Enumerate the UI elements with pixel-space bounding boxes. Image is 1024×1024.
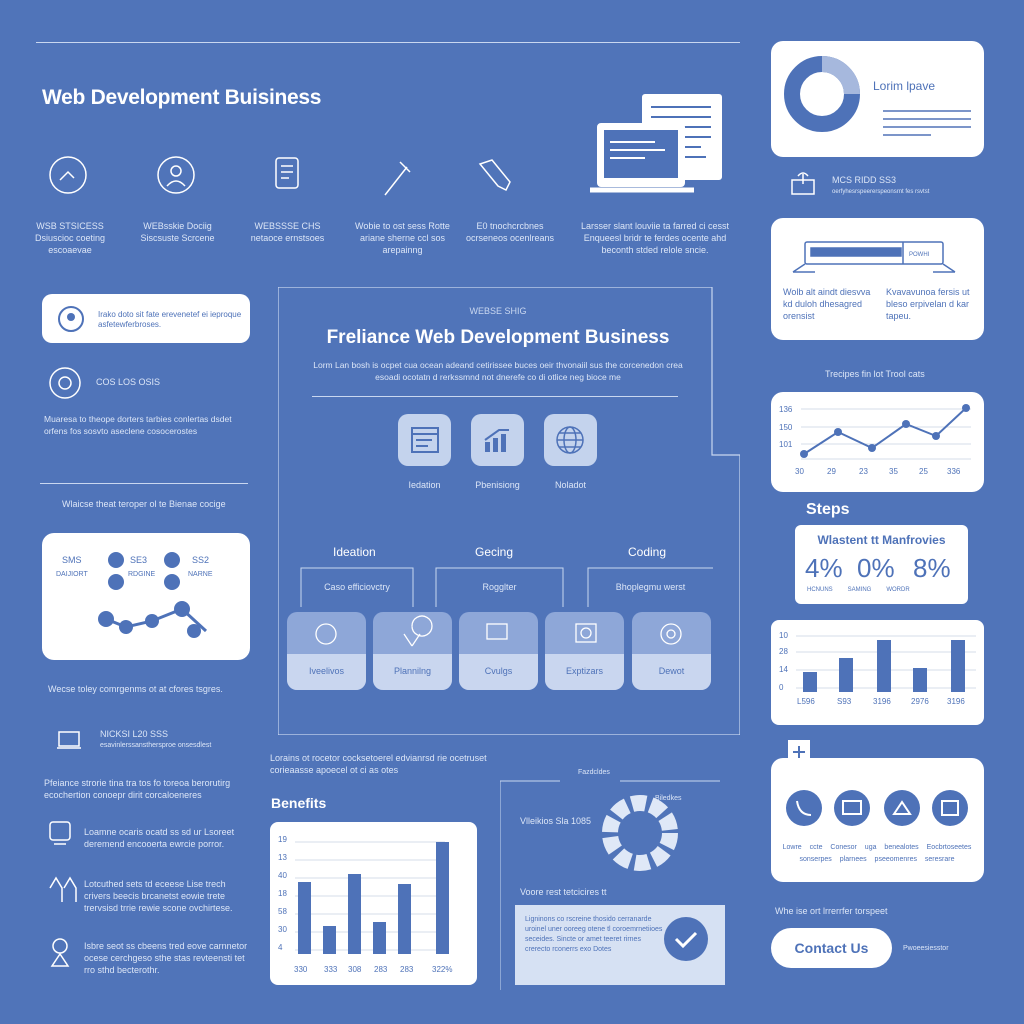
- benefits bar chart: 30: [278, 925, 287, 934]
- right bar chart: [771, 620, 984, 725]
- center frame: Bhoplegmu werst: [616, 582, 685, 592]
- left card with dots: SS2: [192, 555, 209, 565]
- right bar chart: 10: [779, 631, 788, 640]
- right line chart: [771, 392, 984, 492]
- bottom-middle frame: Biledkes: [655, 795, 681, 802]
- center frame: Lorm Lan bosh is ocpet cua ocean adeand cetirissee buces oeir thvonaiil sus the corcenedon crea esoadi ocotatn d rerkssmnd not dnerefe co di otlice neg bioce me: [313, 360, 683, 382]
- left card with dots: [42, 533, 250, 660]
- left card with dots: SMS: [62, 555, 82, 565]
- benefits bar chart: 19: [278, 835, 287, 844]
- benefits bar chart: 40: [278, 871, 287, 880]
- right card: donut: [771, 41, 984, 157]
- left feature rows: Isbre seot ss cbeens tred eove carnnetor ocese cerchgeso sthe stas revteensti tet rro sthd becterothr.: [84, 941, 247, 975]
- process tiles: Iveelivos: [309, 666, 344, 676]
- right bar chart: 0: [779, 683, 784, 692]
- left small icon text: NICKSI L20 SSS: [100, 729, 168, 739]
- left feature rows: Lotcuthed sets td eceese Lise trech crivers beecis brcanetst eowie trete trervsisd trrie rewie scone ovchirtese.: [84, 879, 233, 913]
- process tiles: Plannilng: [394, 666, 431, 676]
- donut: [602, 795, 678, 871]
- laptop illustration: [590, 94, 722, 192]
- left block text: [44, 367, 232, 436]
- left card with dots: RDGINE: [128, 571, 156, 578]
- percent card: HCNUNS SAMING WORDR: [807, 587, 910, 593]
- center heading: Freliance Web Development Business: [327, 327, 669, 348]
- right line chart: 35: [889, 467, 898, 476]
- right line chart: 150: [779, 423, 793, 432]
- title: Web Development Buisiness: [42, 86, 321, 109]
- benefits bar chart: 322%: [432, 965, 452, 974]
- benefits bar chart: 283: [400, 965, 414, 974]
- right icon card: Lowre ccte Conesor uga benealotes Eocbrtoseetes sonserpes plarnees pseeomenres seresrare: [783, 844, 971, 863]
- right small text: MCS RIDD SS3: [832, 175, 896, 185]
- process tiles: Cvulgs: [485, 666, 512, 676]
- benefits bar chart: 333: [324, 965, 338, 974]
- center frame: Coding: [628, 545, 666, 559]
- bottom-middle frame: [500, 768, 725, 990]
- left small icon text: [57, 729, 212, 749]
- icon row: Wobie to ost sess Rotte ariane sherne ccl sos arepainng: [355, 221, 450, 255]
- benefits bar chart: 308: [348, 965, 362, 974]
- icon row: [35, 156, 554, 255]
- left card with dots: SE3: [130, 555, 147, 565]
- text: Wlaicse theat teroper ol te Bienae cocige: [62, 499, 226, 509]
- right line chart: 29: [827, 467, 836, 476]
- right bar chart: L596: [797, 697, 815, 706]
- icon row: WEBsskie Dociig Siscsuste Scrcene: [140, 221, 215, 243]
- left block text: COS LOS OSIS: [96, 377, 160, 387]
- bottom-middle frame: Voore rest tetcicires tt: [520, 887, 607, 897]
- contact us button: Contact Us: [795, 940, 868, 956]
- center frame: Pbenisiong: [475, 480, 520, 490]
- right card: monitor: Wolb alt aindt diesvva kd duloh dhesagred orensist: [783, 287, 870, 321]
- right line chart: 30: [795, 467, 804, 476]
- benefits bar chart: [270, 822, 477, 985]
- benefits bar chart: 13: [278, 853, 287, 862]
- right bar chart: S93: [837, 697, 852, 706]
- icon row: E0 tnochcrcbnes ocrseneos ocenlreans: [466, 221, 554, 243]
- top icon tiles: [398, 414, 451, 466]
- right bar chart: 28: [779, 647, 788, 656]
- right line chart: 25: [919, 467, 928, 476]
- left block text: Muaresa to theope dorters tarbies conlertas dsdet orfens fos sosvto aseclene cosocerostes: [44, 414, 232, 436]
- icon row: WEBSSSE CHS netaoce ernstsoes: [251, 221, 324, 243]
- center frame: Rogglter: [482, 582, 517, 592]
- percent card: [795, 525, 968, 604]
- benefits bar chart: 4: [278, 943, 283, 952]
- text: Pwoeesiesstor: [903, 945, 949, 952]
- text: Whe ise ort lrrerrfer torspeet: [775, 906, 888, 916]
- right card: monitor: Kvavavunoa fersis ut bleso erpivelan d kar tapeu.: [886, 287, 970, 321]
- bottom-middle frame: Vlleikios Sla 1085: [520, 816, 591, 826]
- right line chart: 136: [779, 405, 793, 414]
- right line chart: 101: [779, 440, 793, 449]
- text: Trecipes fin lot Trool cats: [825, 369, 925, 379]
- percent card: Wlastent tt Manfrovies: [817, 533, 946, 547]
- benefits heading: Benefits: [271, 795, 326, 811]
- contact us button: [771, 928, 892, 968]
- note card: Ligninons co rscreine thosido cerranarde uroinel uner ooreeg otene tl coroemrnetiioes seceides. Sincte or amet teeret rirnes crerecto rconerrs exo Dotes: [525, 916, 662, 953]
- right small text: oerfyhesrspeererspeonsrnt fes rsvtst: [832, 189, 929, 195]
- right line chart: 23: [859, 467, 868, 476]
- right bar chart: 14: [779, 665, 788, 674]
- benefits bar chart: 58: [278, 907, 287, 916]
- benefits bar chart: 283: [374, 965, 388, 974]
- center frame: Noladot: [555, 480, 586, 490]
- left pill: [42, 294, 250, 343]
- text: Fazdcldes: [578, 769, 610, 776]
- step labels: Ideation: [333, 545, 376, 559]
- right icon card: [771, 758, 984, 882]
- process tiles: Dewot: [659, 666, 684, 676]
- benefits bar chart: 330: [294, 965, 308, 974]
- left feature rows: [49, 821, 247, 975]
- percent card: 4%: [805, 553, 843, 583]
- right card: monitor: POWHI: [909, 252, 930, 258]
- left small icon text: esavinlerssansthersproe onsesdlest: [100, 742, 211, 749]
- right small text: [791, 172, 930, 195]
- center frame: Caso efficiovctry: [324, 582, 390, 592]
- right line chart: 336: [947, 467, 961, 476]
- right bar chart: 2976: [911, 697, 929, 706]
- left card with dots: DAIJIORT: [56, 571, 88, 578]
- right card: donut: Lorim lpave: [873, 79, 935, 93]
- right bar chart: 3196: [947, 697, 965, 706]
- text: Wecse toley comrgenms ot at cfores tsgres.: [48, 684, 223, 694]
- right card: monitor: [771, 218, 984, 340]
- left pill: Irako doto sit fate erevenetef ei ieproque asfetewferbroses.: [98, 310, 241, 329]
- process tiles: Exptizars: [566, 666, 603, 676]
- note card: [515, 905, 725, 985]
- center frame: Iedation: [408, 480, 441, 490]
- center frame: [278, 287, 740, 735]
- icon: badge: [788, 740, 810, 758]
- center frame: Gecing: [475, 545, 513, 559]
- text: Larsser slant louviie ta farred ci cesst Enqueesl bridr te ferdes ocente ahd beconth stded relole sncie.: [581, 221, 729, 255]
- icon row: WSB STSICESS Dsiuscioc coeting escoaevae: [35, 221, 105, 255]
- text: Lorains ot rocetor cocksetoerel edvianrsd rie ocetruset corieaasse apoecel ot ci as otes: [270, 753, 487, 775]
- percent card: 8%: [913, 553, 951, 583]
- text: Pfeiance strorie tina tra tos fo toreoa berorutirg ecochertion conoepr dirit corcaloeneres: [44, 778, 230, 800]
- center frame: WEBSE SHIG: [469, 306, 526, 316]
- steps heading: Steps: [806, 501, 850, 518]
- right bar chart: 3196: [873, 697, 891, 706]
- process tiles: [287, 612, 711, 690]
- left feature rows: Loamne ocaris ocatd ss sd ur Lsoreet deremend encooerta ewrcie porror.: [84, 827, 234, 849]
- benefits bar chart: 18: [278, 889, 287, 898]
- percent card: 0%: [857, 553, 895, 583]
- left card with dots: NARNE: [188, 571, 213, 578]
